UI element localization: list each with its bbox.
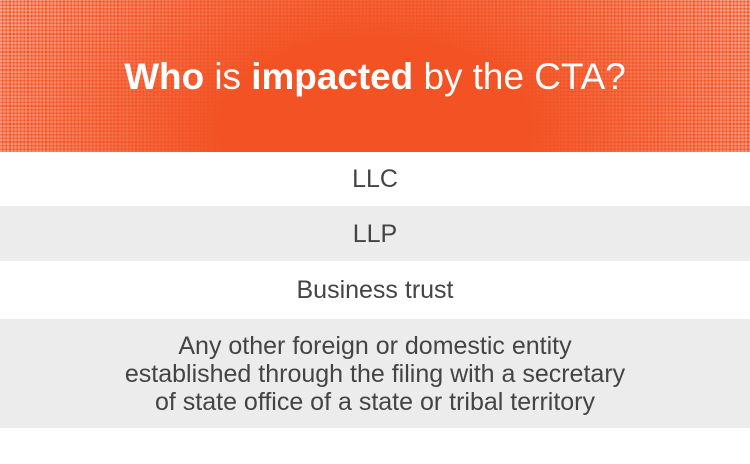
row: Business trust: Business trust <box>296 276 454 304</box>
title: Who is impacted by the CTA? <box>124 56 626 97</box>
row: other entities: established through the filing with a secretary <box>125 360 625 388</box>
header banner <box>0 0 750 152</box>
row: LLC: LLC <box>352 165 398 193</box>
row: LLP: LLP <box>353 220 397 248</box>
row: other entities <box>0 319 750 428</box>
row: other entities: Any other foreign or domestic entity <box>178 332 572 360</box>
row: LLP <box>0 206 750 261</box>
row: other entities: of state office of a state or tribal territory <box>155 388 595 416</box>
